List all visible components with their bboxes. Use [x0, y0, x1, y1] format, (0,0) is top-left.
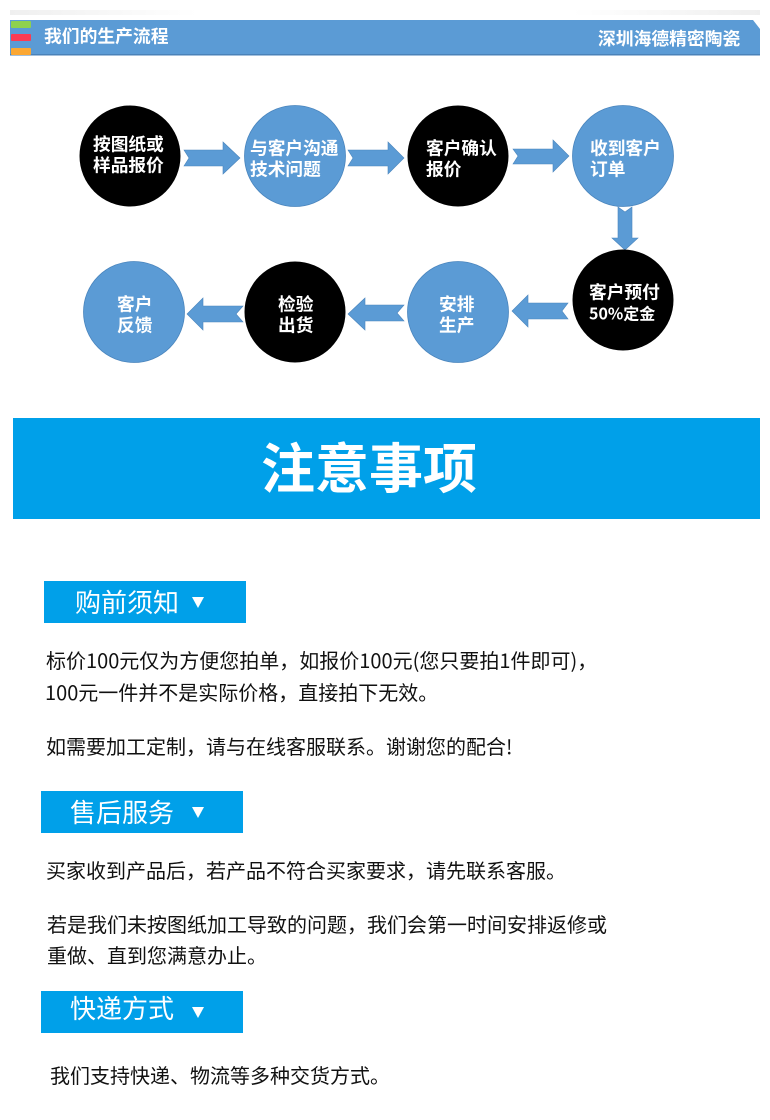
arrow: step 4 to 5	[612, 207, 638, 250]
section heading: after-sales: 售后服务	[70, 793, 174, 830]
text block: before purchase: 100元一件并不是实际价格，直接拍下无效。	[45, 677, 438, 706]
step 8	[84, 262, 184, 362]
header band	[10, 10, 760, 56]
section heading: after-sales	[41, 791, 243, 833]
text block: before purchase	[45, 645, 597, 760]
step 5	[572, 250, 674, 350]
section heading: delivery: 快递方式	[70, 989, 174, 1026]
section heading: delivery	[41, 991, 243, 1033]
step 8: 反馈	[117, 312, 153, 338]
text block: before purchase: 标价100元仅为方便您拍单，如报价100元(您只要拍1件即可)，	[46, 645, 597, 674]
step 2: 与客户沟通	[250, 134, 339, 160]
arrow: step 7 to 8	[187, 298, 243, 330]
step 3: 报价	[426, 156, 462, 182]
step 7: 出货	[278, 312, 314, 338]
header band: 我们的生产流程	[44, 22, 169, 48]
step 8: 客户	[117, 290, 152, 316]
step 6: 安排	[439, 290, 475, 316]
text block: after-sales: 重做、直到您满意办止。	[47, 940, 267, 969]
step 3	[408, 106, 508, 206]
step 5: 50%定金	[589, 300, 655, 324]
banner: notes heading: 注意事项	[261, 425, 477, 504]
step 4: 订单	[590, 156, 625, 182]
arrow: step 3 to 4	[513, 140, 569, 172]
step 7	[244, 262, 346, 362]
process flow chart	[80, 105, 674, 363]
text block: after-sales: 买家收到产品后，若产品不符合买家要求，请先联系客服。	[46, 855, 566, 884]
section heading: before purchase	[44, 581, 246, 623]
text block: delivery: 我们支持快递、物流等多种交货方式。	[50, 1060, 390, 1089]
step 6: 生产	[439, 312, 474, 338]
header band: 深圳海德精密陶瓷	[598, 25, 740, 51]
arrow: step 2 to 3	[348, 142, 404, 174]
step 7: 检验	[278, 290, 314, 316]
banner: notes heading	[13, 418, 760, 519]
step 4: 收到客户	[590, 134, 661, 160]
section heading: before purchase: 购前须知	[75, 583, 179, 620]
step 4	[572, 106, 674, 206]
step 6	[408, 262, 508, 362]
arrow: step 6 to 7	[348, 298, 404, 330]
step 2	[244, 106, 346, 206]
text block: after-sales: 若是我们未按图纸加工导致的问题，我们会第一时间安排返修或	[47, 909, 607, 938]
step 2: 技术问题	[250, 156, 321, 182]
step 3: 客户确认	[426, 134, 497, 160]
text block: before purchase: 如需要加工定制，请与在线客服联系。谢谢您的配合!	[46, 731, 512, 760]
step 1: 按图纸或	[93, 130, 164, 156]
text block: after-sales	[46, 855, 607, 969]
arrow: step 1 to 2	[184, 142, 240, 174]
step 1: 样品报价	[93, 152, 164, 178]
step 1	[80, 106, 180, 206]
step 5: 客户预付	[589, 278, 660, 304]
arrow: step 5 to 6	[512, 295, 568, 327]
